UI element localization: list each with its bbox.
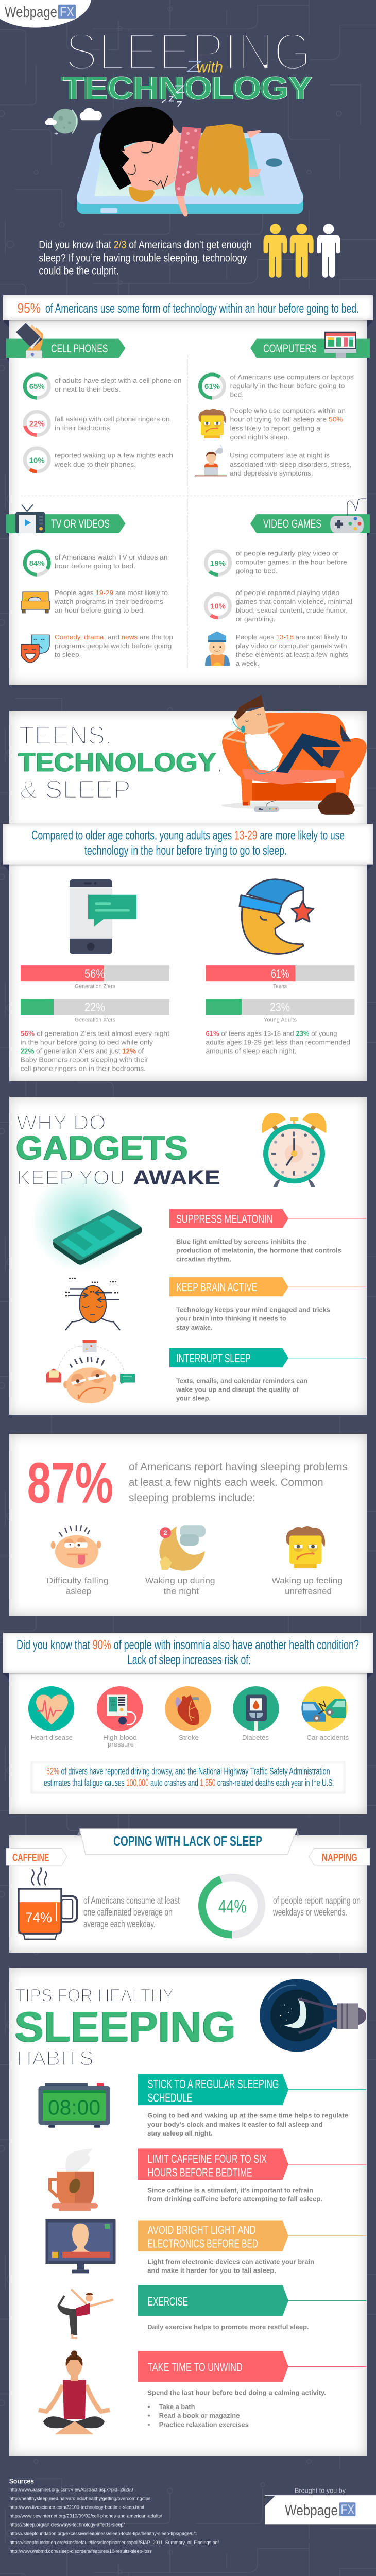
- stat text: 50 percent less likely: [230, 407, 346, 441]
- ribbon: stick to schedule: SCHEDULE: [148, 2092, 192, 2105]
- stat text: ringers on: [55, 415, 170, 432]
- ribbon: keep brain active: [169, 1277, 366, 1296]
- icon: phone with chat bubble: [70, 879, 136, 954]
- labels: health risks: Heart disease: [31, 1734, 73, 1741]
- heading: teens technology and sleep: TECHNOLOGY: [19, 748, 217, 777]
- bar: generation X'ers 22 percent: [21, 999, 169, 1023]
- credit: brought to you by WebpageFX: Brought to you by: [295, 2487, 346, 2495]
- banner text: insomnia: Lack of sleep increases risk of:: [127, 1653, 251, 1667]
- ribbon: stick to schedule: STICK TO A REGULAR SLEEPING: [148, 2078, 279, 2091]
- logo: WebpageFX top: Webpage: [5, 4, 57, 21]
- heading: teens technology and sleep: & SLEEP: [20, 775, 131, 804]
- ribbon: avoid bright light: [138, 2220, 366, 2251]
- ribbon: caffeine: CAFFEINE: [12, 1851, 49, 1863]
- text: less than recommended sleep: 61% of teens ages 13-18 and 23% of young: [206, 1030, 337, 1037]
- panel: technology types: [9, 320, 367, 685]
- heading: tips for healthy sleeping habits: HABITS: [16, 2046, 94, 2070]
- bar: generation Z'ers 56 percent: 56%: [84, 967, 105, 981]
- donut: 10 percent games: [206, 594, 230, 618]
- icon: bed: [21, 592, 50, 613]
- text: generations comparison: Baby Boomers report sleeping with their: [21, 1056, 149, 1064]
- ribbon: exercise: EXERCISE: [148, 2295, 188, 2309]
- text: regular schedule: your body’s clock and makes it easier to fall asleep and: [147, 2121, 323, 2128]
- stat text: violent games: [236, 589, 352, 623]
- stat text: play games: going to bed.: [236, 567, 278, 575]
- bar: young adults 23 percent: Young Adults: [264, 1017, 297, 1023]
- heading: why do gadgets keep you awake: GADGETS: [16, 1129, 189, 1167]
- banner: coping with lack of sleep: [77, 1829, 299, 1855]
- icon: theatre masks: [21, 635, 49, 663]
- stat text: comedy drama news: to sleep.: [55, 651, 81, 658]
- ribbon: TV or videos: [6, 514, 126, 537]
- text: avoid bright light: and make it harder for you to fall asleep.: [147, 2267, 276, 2274]
- stat text: violent games: or gambling.: [236, 615, 276, 623]
- stat text: computers before bed: of Americans use computers or laptops: [230, 374, 354, 381]
- donut: 19 percent: [206, 551, 230, 574]
- panel: tips for healthy sleeping habits: [9, 1968, 367, 2456]
- icon: diabetes: [233, 1686, 279, 1731]
- stat text: violent games: blood, sexual content, crude humor,: [236, 606, 348, 614]
- ribbon: avoid bright light: AVOID BRIGHT LIGHT AND: [148, 2224, 256, 2237]
- donut: 84 percent: 84%: [29, 560, 45, 568]
- donut: 19 percent: 19%: [210, 560, 226, 568]
- icon: high blood pressure: 78: [111, 1704, 115, 1707]
- icon: meditating woman: [39, 2350, 110, 2434]
- heading: tips for healthy sleeping habits: [15, 1985, 236, 2070]
- icon: desktop computer: [324, 332, 356, 358]
- ribbon: stick to schedule: [138, 2074, 366, 2105]
- icon: tired face with notifications: [46, 1340, 135, 1403]
- panel: why gadgets keep you awake: [9, 1097, 367, 1415]
- stat text: late at night: Using computers late at night is: [230, 452, 330, 460]
- icon: stroke: [165, 1686, 211, 1731]
- credit: brought to you by WebpageFX: FX: [341, 2501, 354, 2517]
- text: caffeinated beverage: of Americans consume at least: [83, 1895, 180, 1906]
- sources: https://sleep.org/articles/ways-technology-affects-sleep/: [10, 2522, 125, 2527]
- donut: 84 percent: [25, 551, 49, 574]
- credit: brought to you by WebpageFX: [265, 2487, 376, 2524]
- label: waking up during the night: Waking up during: [145, 1577, 215, 1585]
- bar: generation Z'ers 56 percent: Generation Z’ers: [75, 984, 116, 989]
- bar: teens 61 percent: [206, 965, 354, 989]
- text: sleeping problems: of Americans report having sleeping problems: [129, 1460, 348, 1473]
- text: avoid bright light: Light from electronic devices can activate your brain: [147, 2258, 314, 2265]
- title: with: [197, 59, 223, 76]
- label: waking up during the night: the night: [164, 1587, 199, 1596]
- ribbon: computers: [250, 339, 370, 361]
- label: waking up during the night: [145, 1577, 215, 1596]
- label: waking up feeling unrefreshed: unrefreshed: [285, 1587, 332, 1596]
- text: less than recommended sleep: [206, 1030, 350, 1055]
- text: blue light: production of melatonin, the hormone that controls: [176, 1247, 341, 1254]
- heading: why do gadgets keep you awake: KEEP YOU: [16, 1166, 125, 1189]
- callout text: drowsy driving: [44, 1766, 334, 1788]
- title: TECHNOLOGY: [63, 71, 313, 106]
- title: [63, 23, 313, 107]
- icon: heart disease: [28, 1686, 74, 1731]
- icon: boy with cap: [205, 632, 230, 666]
- text: notifications: your sleep.: [176, 1395, 211, 1402]
- icon: waking up during the night moon: [159, 1525, 206, 1571]
- illustration: teen on sofa: [221, 694, 367, 815]
- text: generations comparison: [21, 1030, 169, 1073]
- ribbon: interrupt sleep: INTERRUPT SLEEP: [176, 1352, 251, 1365]
- credit: brought to you by WebpageFX: Webpage: [285, 2502, 338, 2519]
- text: caffeinated beverage: average each weekday.: [83, 1919, 156, 1930]
- panel: sleeping problems: [9, 1434, 367, 1616]
- icon: sleeping moon with nightcap: [240, 879, 314, 954]
- labels: health risks: pressure: [108, 1740, 134, 1748]
- icon: television: [15, 505, 45, 533]
- stat text: cell phone on beds: of adults have slept with a cell phone on: [55, 377, 182, 384]
- icon: coffee cup: [50, 2148, 98, 2211]
- icon: tired lego face: [198, 409, 226, 438]
- icon: coffee mug 74 percent: 74%: [25, 1910, 52, 1925]
- icon: busy head with arrows: [65, 1278, 120, 1330]
- icon: difficulty falling asleep face: [50, 1525, 101, 1568]
- text: blue light: Blue light emitted by screens inhibits the: [176, 1238, 306, 1245]
- text: sleeping problems: sleeping problems include:: [129, 1491, 255, 1504]
- donut: 10 percent: 10%: [29, 457, 45, 465]
- bar: generation Z'ers 56 percent: [21, 965, 169, 989]
- ribbon: take time to unwind: [138, 2351, 366, 2382]
- logo: WebpageFX top: FX: [60, 4, 74, 20]
- text: regular schedule: Going to bed and waking up at the same time helps to regulate: [147, 2112, 348, 2120]
- ribbon: computers: COMPUTERS: [263, 342, 317, 355]
- icon: tired lego face large: [286, 1526, 325, 1568]
- stat text: ages 13-18: these elements at least a few nights: [236, 651, 348, 658]
- donut: 10 percent: [25, 448, 49, 471]
- bar: teens 61 percent: 61%: [271, 967, 289, 981]
- icon: digital alarm clock: [38, 2083, 110, 2128]
- ribbon: avoid bright light: ELECTRONICS BEFORE BED: [148, 2238, 258, 2251]
- text: technology engages mind: [176, 1306, 330, 1331]
- donut: 61 percent: 61%: [204, 383, 220, 391]
- sources: http://www.livescience.com/22100-technology-bedtime-sleep.html: [10, 2504, 144, 2510]
- stat text: late at night: and depressive symptoms.: [230, 469, 313, 477]
- ribbon: video games: VIDEO GAMES: [263, 518, 321, 530]
- intro text: could be the culprit.: [39, 264, 119, 277]
- donut: 65 percent: 65%: [29, 383, 45, 391]
- text: limit caffeine: Since caffeine is a stimulant, it’s important to refrain: [147, 2187, 313, 2194]
- stat text: ages 13-18: [236, 633, 348, 667]
- text: limit caffeine: from drinking caffeine before attempting to fall asleep.: [147, 2195, 322, 2203]
- panel: health risks: [9, 1668, 367, 1814]
- icon: digital alarm clock: 08:00: [48, 2096, 100, 2119]
- heading: teens technology and sleep: ,: [218, 764, 220, 773]
- donut: 22 percent: 22%: [29, 420, 45, 429]
- stat text: TV before bed: of Americans watch TV or videos an: [55, 553, 168, 561]
- intro text: sleep? If you’re having trouble sleeping, technology: [39, 251, 247, 264]
- stat text: 50 percent less likely: good night’s sleep.: [230, 433, 289, 441]
- heading: tips for healthy sleeping habits: SLEEPING: [15, 2003, 236, 2050]
- donut: 44 percent napping: [202, 1877, 262, 1935]
- icon: monitor with person: [45, 2219, 115, 2273]
- stat text: comedy drama news: [55, 633, 173, 658]
- heading: teens technology and sleep: TEENS,: [19, 721, 112, 750]
- text: unwind activities: Take a bath: [159, 2403, 195, 2411]
- stat text: violent games: of people reported playing video: [236, 589, 339, 597]
- text: unwind activities: Read a book or magazine: [159, 2412, 240, 2419]
- label: difficulty falling asleep: [46, 1577, 109, 1596]
- stat text: ages 19-29: an hour before going to bed.: [55, 606, 145, 614]
- bar: young adults 23 percent: 23%: [270, 1001, 290, 1014]
- icon: two of three people: [264, 224, 340, 278]
- icon: yoga dancer pose: [58, 2289, 113, 2338]
- ribbon: napping: [309, 1849, 370, 1865]
- text: technology engages mind: Technology keeps your mind engaged and tricks: [176, 1306, 330, 1314]
- text: generations comparison: cell phone ringers on in their bedrooms.: [21, 1065, 146, 1073]
- labels: health risks: Car accidents: [307, 1734, 349, 1741]
- icon: person at laptop: [195, 445, 227, 476]
- sources: http://healthysleep.med.harvard.edu/healthy/getting/overcoming/tips: [10, 2496, 151, 2501]
- labels: health risks: [31, 1734, 349, 1748]
- stat text: ages 19-29: People ages 19-29 are most likely to: [55, 589, 168, 597]
- text: blue light: [176, 1238, 341, 1263]
- ribbon: exercise: [138, 2285, 366, 2316]
- heading: why do gadgets keep you awake: [16, 1111, 220, 1189]
- ribbon: napping: NAPPING: [322, 1851, 357, 1863]
- panel: teens statistics: [9, 858, 367, 1081]
- stat text: waking up: [54, 452, 173, 468]
- icon: high blood pressure: 122: [110, 1699, 116, 1703]
- heading: why do gadgets keep you awake: AWAKE: [133, 1166, 220, 1189]
- bar: generation X'ers 22 percent: Generation X’ers: [75, 1017, 116, 1023]
- donut: 22 percent: [25, 412, 49, 435]
- sources: http://www.webmd.com/sleep-disorders/features/10-results-sleep-loss: [10, 2549, 152, 2554]
- title: SLEEPING: [65, 23, 312, 81]
- text: blue light: circadian rhythm.: [176, 1256, 231, 1263]
- stat text: computers before bed: [230, 374, 354, 399]
- text: exercise: Daily exercise helps to promote more restful sleep.: [147, 2323, 309, 2331]
- donut: 65 percent: [25, 375, 49, 398]
- text: sleeping problems: [129, 1460, 348, 1504]
- banner: coping with lack of sleep: COPING WITH LACK OF SLEEP: [113, 1833, 262, 1850]
- banner: young adults: [3, 824, 373, 865]
- text: unwind activities: •: [148, 2403, 150, 2411]
- stat text: ages 19-29: [54, 589, 168, 614]
- ribbon: limit caffeine: HOURS BEFORE BEDTIME: [148, 2166, 252, 2179]
- ribbon: take time to unwind: TAKE TIME TO UNWIND: [148, 2361, 243, 2374]
- intro text: [39, 238, 252, 277]
- banner text: 95 percent: 95%: [18, 300, 41, 316]
- text: generations comparison: 56% of generation Z’ers text almost every night: [21, 1030, 169, 1037]
- sources: http://www.aasmnet.org/jcsm/ViewAbstract.aspx?pid=29250: [10, 2487, 133, 2492]
- text: napping: [272, 1895, 361, 1918]
- icon: coffee mug 74 percent: [19, 1867, 77, 1939]
- text: less than recommended sleep: adults ages 19-29 get less than recommended: [206, 1039, 350, 1046]
- label: difficulty falling asleep: asleep: [66, 1587, 91, 1596]
- text: avoid bright light: [147, 2258, 314, 2274]
- stat text: ages 13-18: People ages 13-18 are most likely to: [236, 633, 347, 641]
- text: regular schedule: [147, 2112, 348, 2137]
- donut: 44 percent napping: 44%: [218, 1896, 247, 1917]
- icon: hand holding phone: [16, 323, 43, 358]
- text: limit caffeine: [147, 2187, 322, 2203]
- statistic: 87 percent: 87%: [27, 1451, 113, 1515]
- banner text: insomnia: [16, 1638, 359, 1667]
- text: caffeinated beverage: one caffeinated beverage on: [83, 1907, 173, 1918]
- text: caffeinated beverage: [83, 1895, 180, 1930]
- label: waking up feeling unrefreshed: [272, 1577, 343, 1596]
- stat text: play games: computer games in the hour before: [236, 558, 347, 566]
- stat text: ages 13-18: play video or computer games with: [236, 642, 347, 650]
- stat text: ages 19-29: watch programs in their bedrooms: [54, 598, 163, 605]
- bar: generation X'ers 22 percent: 22%: [84, 1001, 105, 1014]
- stat text: computers before bed: bed.: [230, 391, 244, 399]
- icon: game controller: [330, 499, 366, 533]
- icon: glowing phone: [31, 1172, 142, 1272]
- stat text: comedy drama news: programs people watch before going: [55, 642, 172, 650]
- stat text: late at night: associated with sleep disorders, stress,: [230, 461, 352, 468]
- icon: light bulb with moon: [260, 1979, 366, 2052]
- text: unwind activities: Practice relaxation exercises: [159, 2421, 249, 2429]
- text: unwind activities: •: [148, 2412, 150, 2419]
- icon: high blood pressure: [97, 1686, 143, 1731]
- stat text: ringers on: fall asleep with cell phone ringers on: [55, 415, 170, 423]
- bar: young adults 23 percent: [206, 999, 354, 1023]
- ribbon: cell phones: CELL PHONES: [51, 342, 108, 355]
- logo: WebpageFX top: [0, 0, 91, 28]
- donut: 10 percent games: 10%: [210, 603, 226, 611]
- ribbon: keep brain active: KEEP BRAIN ACTIVE: [176, 1281, 258, 1294]
- stat text: cell phone on beds: [55, 377, 181, 393]
- donut: 61 percent: [200, 375, 225, 398]
- stat text: TV before bed: [55, 553, 168, 570]
- stat text: comedy drama news: Comedy, drama, and news are the top: [55, 633, 173, 641]
- stat text: 50 percent less likely: People who use computers within an: [230, 407, 346, 414]
- labels: health risks: Stroke: [179, 1734, 199, 1741]
- stat text: cell phone on beds: or next to their beds.: [55, 385, 121, 393]
- stat text: play games: [236, 550, 347, 575]
- icon: waking up during the night moon: 2: [163, 1529, 167, 1537]
- text: sleeping problems: at least a few nights each week. Common: [129, 1476, 323, 1488]
- text: less than recommended sleep: amounts of sleep each night.: [206, 1047, 297, 1055]
- labels: health risks: High blood: [103, 1734, 137, 1741]
- banner: 95 percent: [3, 295, 373, 320]
- sources: Sources: [9, 2478, 34, 2485]
- ribbon: suppress melatonin: SUPPRESS MELATONIN: [176, 1213, 272, 1226]
- ribbon: suppress melatonin: [169, 1209, 366, 1228]
- ribbon: caffeine: [6, 1849, 67, 1865]
- text: technology engages mind: your brain into thinking it needs to: [176, 1315, 286, 1323]
- banner: insomnia: [3, 1633, 373, 1673]
- label: difficulty falling asleep: Difficulty falling: [46, 1577, 109, 1585]
- ribbon: video games: [250, 514, 370, 537]
- stat text: play games: of people regularly play video or: [236, 550, 339, 557]
- ribbon: limit caffeine: LIMIT CAFFEINE FOUR TO SIX: [148, 2153, 267, 2166]
- sources: https://sleepfoundation.org/sites/default/files/sleepinamericapoll/SIAP_2011_Summary_of_Findings.pdf: [10, 2540, 219, 2545]
- sources: [9, 2478, 219, 2554]
- text: unwind activities: Spend the last hour before bed doing a calming activity.: [147, 2389, 326, 2396]
- ribbon: TV or videos: TV OR VIDEOS: [51, 518, 110, 530]
- ribbon: limit caffeine: [138, 2148, 366, 2180]
- text: regular schedule: stay asleep all night.: [147, 2129, 213, 2137]
- icon: alarm clock: [262, 1113, 327, 1187]
- icon: car accidents: [301, 1686, 348, 1731]
- text: generations comparison: 22% of generation X’ers and just 12% of: [21, 1047, 144, 1055]
- labels: health risks: Diabetes: [242, 1734, 269, 1741]
- bar: teens 61 percent: Teens: [273, 984, 287, 989]
- panel: teens heading: [9, 711, 367, 831]
- stat text: 50 percent less likely: less likely to report getting a: [230, 425, 321, 432]
- text: notifications: wake you up and disrupt the quality of: [176, 1386, 299, 1393]
- stat text: violent games: games that contain violence, minimal: [236, 598, 352, 605]
- intro text: Did you know that 2/3 of Americans don’t get enough: [39, 238, 252, 251]
- heading: teens technology and sleep: [19, 721, 220, 804]
- stat text: waking up: reported waking up a few nights each: [55, 452, 173, 460]
- stat text: late at night: [230, 452, 352, 477]
- stat text: TV before bed: hour before going to bed.: [55, 562, 135, 570]
- text: notifications: [176, 1377, 307, 1402]
- stat text: computers before bed: regularly in the hour before going to: [230, 382, 345, 389]
- callout box: drowsy driving: [31, 1761, 345, 1793]
- heading: why do gadgets keep you awake: WHY DO: [16, 1111, 106, 1134]
- text: generations comparison: in the hour before going to bed while only: [21, 1039, 153, 1046]
- text: notifications: Texts, emails, and calendar reminders can: [176, 1377, 307, 1384]
- text: unwind activities: [147, 2389, 326, 2429]
- ribbon: interrupt sleep: [169, 1348, 366, 1367]
- stat text: 50 percent less likely: hour of trying to fall asleep are 50%: [230, 416, 343, 423]
- sources: https://sleepfoundation.org/excessivesleepiness/sleep-tools-tips/healthy-sleep-tips/page/0/1: [10, 2531, 197, 2536]
- ribbon: cell phones: [6, 339, 126, 361]
- banner text: young adults: [31, 828, 345, 858]
- heading: tips for healthy sleeping habits: TIPS FOR HEALTHY: [15, 1985, 174, 2006]
- stat text: ages 13-18: a week.: [236, 659, 259, 667]
- text: technology engages mind: stay awake.: [176, 1324, 213, 1331]
- stat text: ringers on: in their bedrooms.: [55, 424, 112, 432]
- label: waking up feeling unrefreshed: Waking up feeling: [272, 1577, 343, 1585]
- text: unwind activities: •: [148, 2421, 150, 2429]
- sources: http://www.pewinternet.org/2010/09/02/cell-phones-and-american-adults/: [10, 2514, 162, 2519]
- banner text: young adults: technology in the hour before trying to go to sleep.: [84, 844, 287, 858]
- illustration: girl asleep on giant phone: [77, 107, 303, 216]
- icon: moon and clouds: [45, 108, 102, 135]
- panel: coping with lack of sleep: [9, 1835, 367, 1953]
- stat text: waking up: week due to their phones.: [54, 461, 136, 468]
